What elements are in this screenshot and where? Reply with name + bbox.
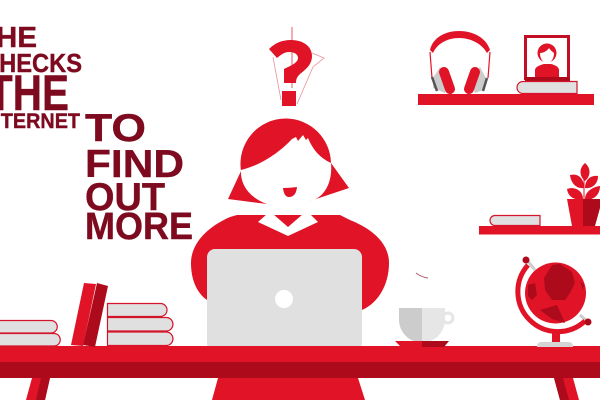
character lower body bbox=[212, 378, 365, 400]
headline text: TO bbox=[85, 107, 146, 150]
icon: headphones bbox=[430, 31, 490, 93]
icon: coffee cup bbox=[395, 273, 453, 347]
laptop bbox=[207, 249, 362, 351]
book stack: left bbox=[0, 320, 60, 346]
table bbox=[0, 346, 600, 400]
face bbox=[241, 135, 331, 215]
book on lower shelf bbox=[490, 216, 540, 226]
mouth bbox=[283, 187, 297, 197]
body bbox=[191, 215, 389, 310]
picture frame bbox=[525, 36, 570, 81]
standing books bbox=[71, 283, 108, 347]
book stack: centre bbox=[108, 304, 173, 346]
headline text bbox=[0, 22, 193, 248]
book under frame bbox=[517, 82, 577, 94]
hair bbox=[228, 118, 349, 204]
top shelf bbox=[418, 94, 594, 105]
right leg bbox=[554, 378, 579, 400]
headline text: OUT bbox=[85, 176, 165, 219]
collar bbox=[258, 214, 318, 236]
lower shelf bbox=[479, 226, 600, 234]
headline text: FIND bbox=[85, 143, 184, 186]
icon: globe bbox=[518, 256, 592, 347]
character: woman at laptop bbox=[191, 118, 389, 310]
icon: question mark bbox=[269, 27, 324, 106]
icon: potted plant bbox=[567, 163, 600, 226]
headline text: MORE bbox=[85, 206, 193, 248]
left leg bbox=[26, 378, 50, 400]
